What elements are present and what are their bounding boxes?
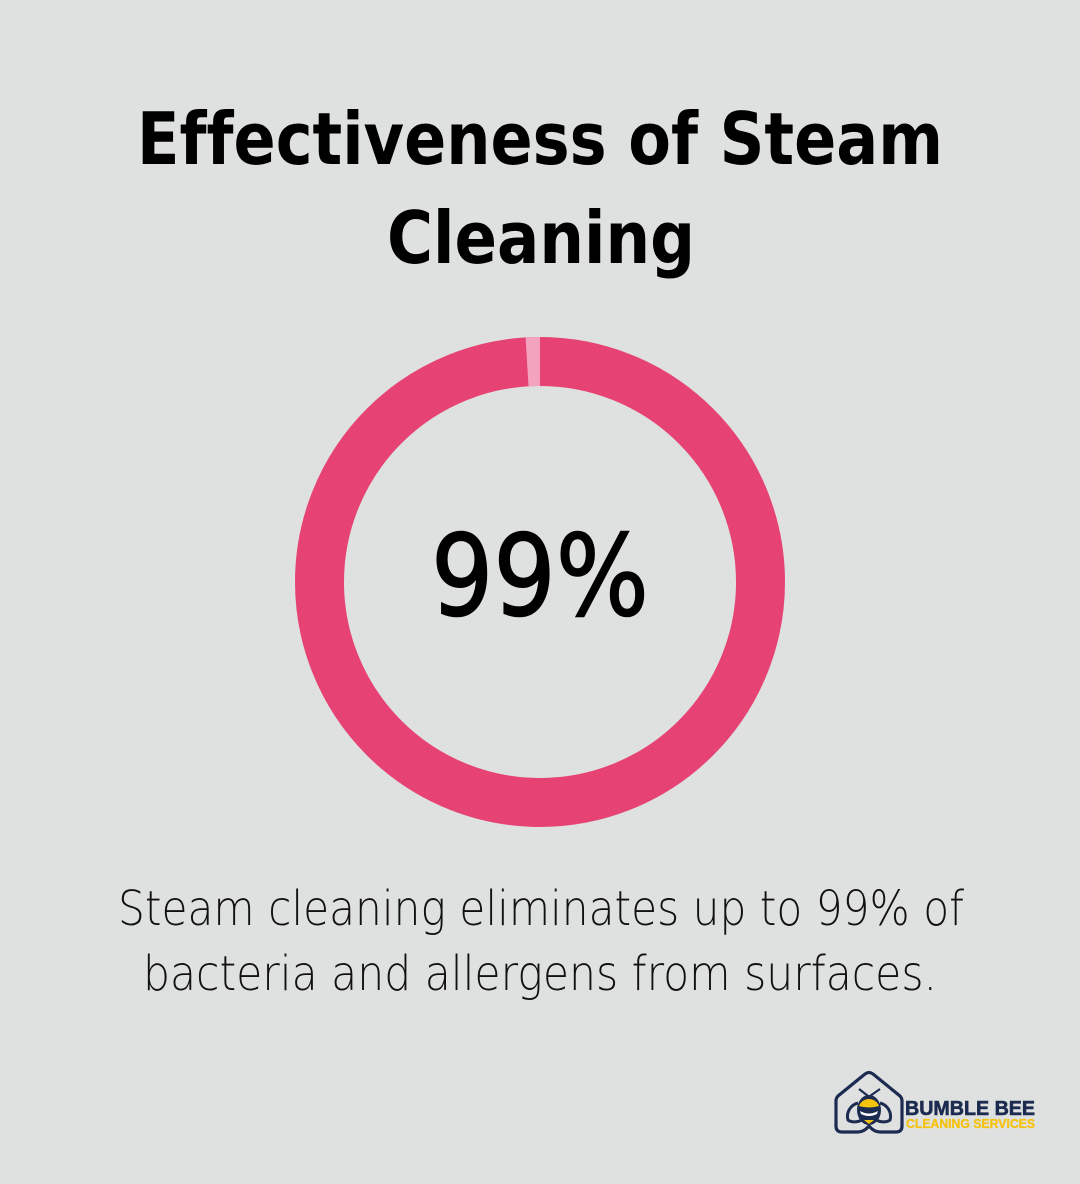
logo: Bumble Bee Cleaning Services	[836, 1072, 1035, 1132]
title: Effectiveness of Steam	[137, 97, 943, 181]
description text: bacteria and allergens from surfaces.	[143, 946, 937, 1002]
title: Cleaning	[387, 196, 695, 280]
description text	[118, 881, 964, 1002]
title	[137, 97, 943, 280]
logo name: BUMBLE BEE	[905, 1098, 1035, 1120]
description text: Steam cleaning eliminates up to 99% of	[118, 881, 964, 937]
logo tagline: CLEANING SERVICES	[906, 1117, 1035, 1131]
donut chart: 99%	[320, 337, 760, 802]
icon: house with bee	[836, 1072, 902, 1132]
donut value: 99%	[431, 512, 649, 642]
